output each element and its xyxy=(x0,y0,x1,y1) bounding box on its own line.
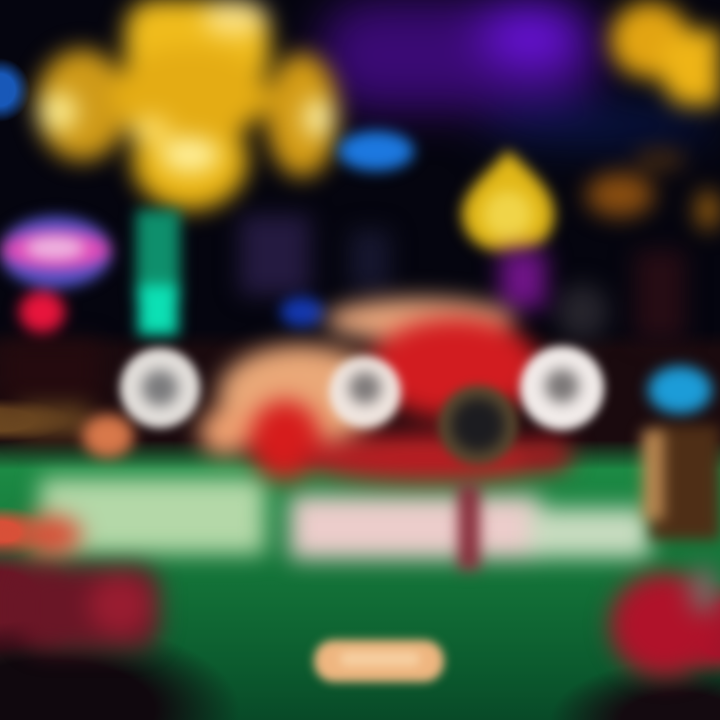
yellow drop xyxy=(462,150,554,252)
dim background pillars xyxy=(0,215,685,400)
purple glow xyxy=(320,0,720,147)
dark chip xyxy=(438,385,518,465)
yellow top-right balloon xyxy=(610,2,720,106)
white chip middle xyxy=(329,356,401,428)
blue lamp xyxy=(648,366,712,414)
orange dim lights xyxy=(586,151,720,230)
brown box right xyxy=(642,425,720,540)
teal stem xyxy=(136,210,180,335)
blue lights xyxy=(280,131,414,327)
wood rail left xyxy=(20,405,90,435)
white chip left xyxy=(120,348,200,428)
red cup bottom right xyxy=(610,566,720,677)
red and peach chip mass xyxy=(199,298,573,482)
purple stem xyxy=(500,250,546,308)
yellow flower balloon cluster xyxy=(36,0,338,210)
white chip right xyxy=(520,346,604,430)
neon sign left xyxy=(0,216,112,333)
peach pill bar xyxy=(314,640,444,682)
pale table panels xyxy=(40,478,650,559)
peach chip left xyxy=(82,414,134,458)
red cup bottom left xyxy=(18,515,160,650)
dark red post xyxy=(458,485,480,570)
